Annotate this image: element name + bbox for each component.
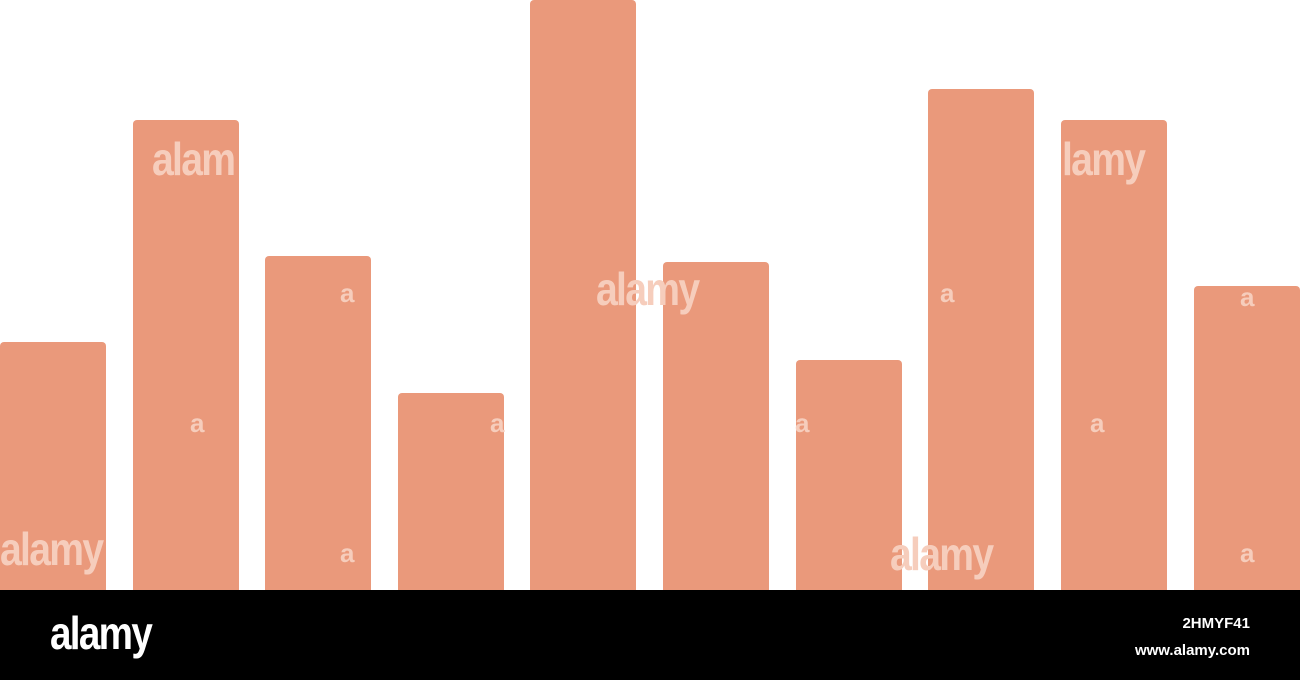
bar 9 <box>1061 120 1167 590</box>
watermark: a <box>340 538 354 568</box>
bar 5 <box>530 0 636 590</box>
watermark: a <box>190 408 204 438</box>
bar 3 <box>265 256 371 590</box>
watermark: alamy <box>596 263 698 315</box>
bar 7 <box>796 360 902 590</box>
watermark: lamy <box>1062 133 1144 185</box>
watermark: a <box>340 278 354 308</box>
watermark: a <box>1090 408 1104 438</box>
watermark: a <box>940 278 954 308</box>
watermark: a <box>795 408 809 438</box>
watermark: alamy <box>890 528 992 580</box>
bar 10 <box>1194 286 1300 590</box>
watermark: a <box>490 408 504 438</box>
image id: www.alamy.com <box>1135 642 1250 659</box>
image id: 2HMYF41 <box>1182 615 1250 632</box>
watermark: alamy <box>0 523 102 575</box>
logo: alamy <box>50 607 151 659</box>
bar 6 <box>663 262 769 590</box>
footer band <box>0 590 1300 680</box>
bar 2 <box>133 120 239 590</box>
watermark: a <box>1240 538 1254 568</box>
image id <box>1135 615 1250 659</box>
watermark: a <box>1240 282 1254 312</box>
watermark: alam <box>152 133 234 185</box>
bar 4 <box>398 393 504 590</box>
bar 8 <box>928 89 1034 590</box>
bar 1 <box>0 342 106 590</box>
